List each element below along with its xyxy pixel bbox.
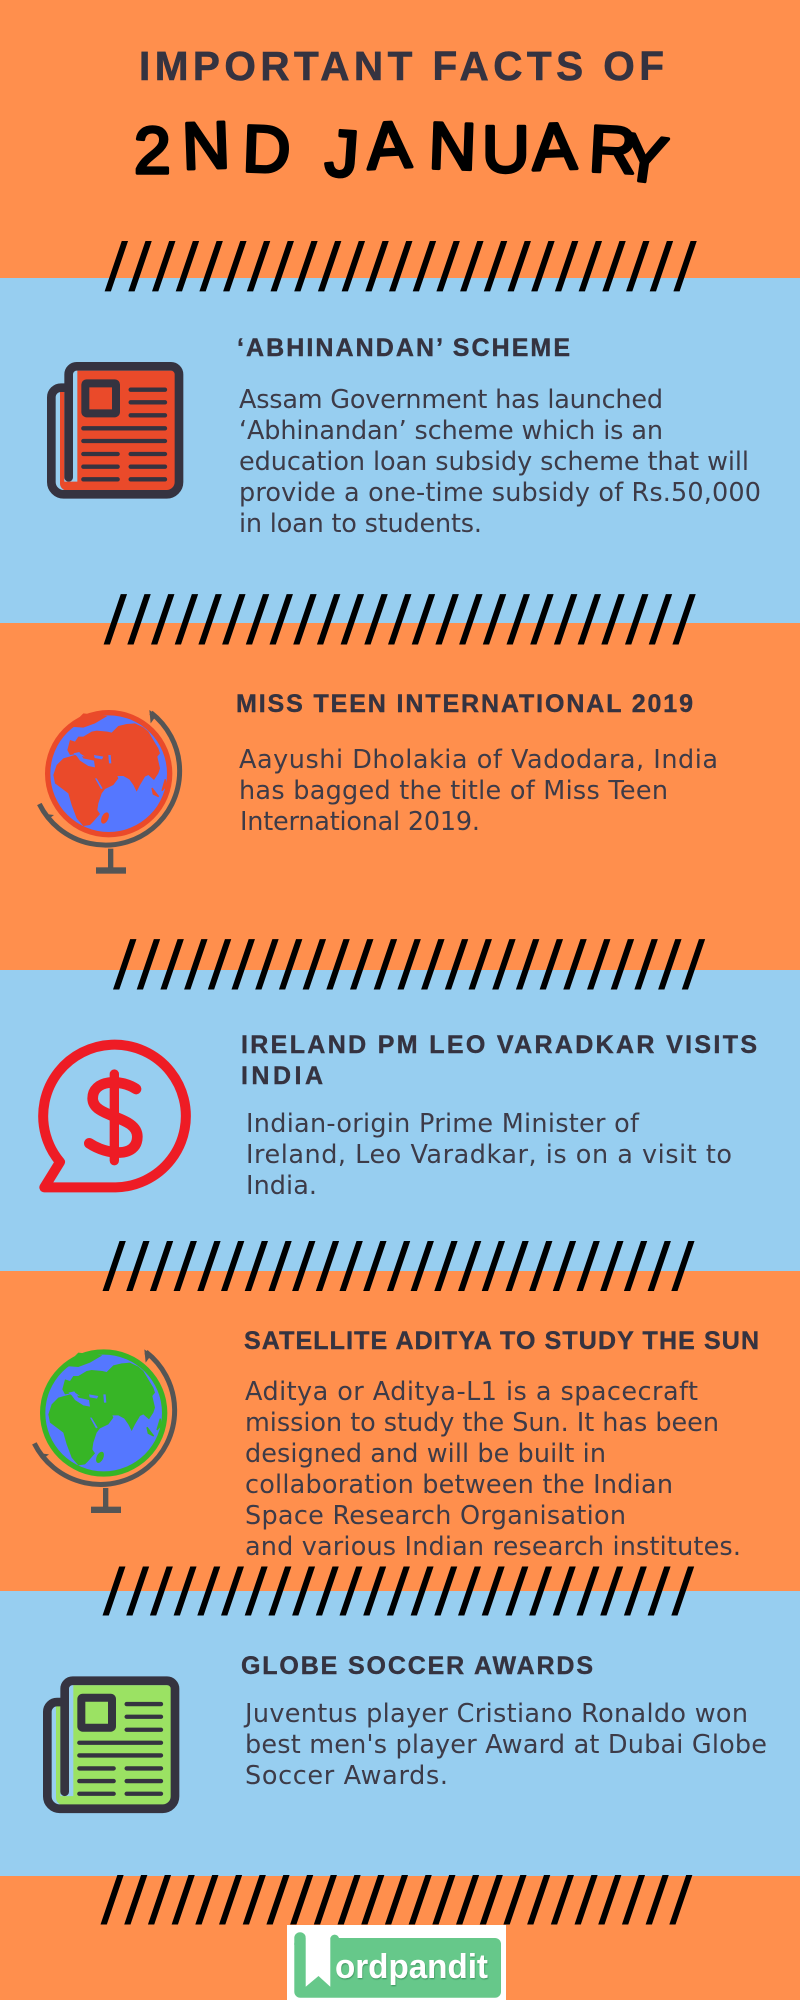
- body text: Indian-origin Prime Minister of: [246, 1109, 640, 1139]
- icon: dollar speech bubble: [43, 1045, 186, 1187]
- logo: Wordpandit: ordpandit: [335, 1948, 488, 1986]
- icon: red newspaper: [51, 366, 179, 494]
- body text: India.: [246, 1171, 317, 1201]
- body text: International 2019.: [240, 807, 480, 837]
- body text: [239, 745, 718, 837]
- body text: ‘Abhinandan’ scheme which is an: [239, 416, 663, 446]
- body text: [246, 1109, 732, 1201]
- body text: Soccer Awards.: [245, 1761, 448, 1791]
- body text: collaboration between the Indian: [245, 1470, 673, 1500]
- body text: Aditya or Aditya-L1 is a spacecraft: [245, 1377, 698, 1407]
- body text: Aayushi Dholakia of Vadodara, India: [239, 745, 718, 775]
- panel: footer: [0, 1876, 800, 2000]
- body text: provide a one-time subsidy of Rs.50,000: [239, 478, 761, 508]
- body text: and various Indian research institutes.: [245, 1532, 741, 1562]
- body text: [239, 385, 761, 539]
- body text: Space Research Organisation: [245, 1501, 626, 1531]
- heading: [241, 1031, 757, 1090]
- icon: green newspaper: [47, 1681, 175, 1809]
- heading: IRELAND PM LEO VARADKAR VISITS: [241, 1031, 757, 1059]
- body text: Ireland, Leo Varadkar, is on a visit to: [246, 1140, 732, 1170]
- body text: designed and will be built in: [245, 1439, 606, 1469]
- body text: has bagged the title of Miss Teen: [239, 776, 668, 806]
- heading: INDIA: [241, 1062, 323, 1090]
- panel: Globe Soccer Awards: [0, 1591, 800, 1876]
- icon: green globe: [34, 1349, 175, 1513]
- heading: SATELLITE ADITYA TO STUDY THE SUN: [244, 1327, 759, 1355]
- body text: mission to study the Sun. It has been: [245, 1408, 719, 1438]
- body text: education loan subsidy scheme that will: [239, 447, 749, 477]
- body text: Assam Government has launched: [239, 385, 663, 415]
- body text: [245, 1377, 741, 1562]
- title: important facts of: IMPORTANT FACTS OF: [139, 43, 664, 89]
- heading: MISS TEEN INTERNATIONAL 2019: [236, 690, 693, 718]
- heading: GLOBE SOCCER AWARDS: [241, 1652, 593, 1680]
- body text: in loan to students.: [239, 509, 482, 539]
- body text: best men's player Award at Dubai Globe: [245, 1730, 767, 1760]
- body text: [243, 1699, 767, 1791]
- panel: Miss Teen International: [0, 623, 800, 970]
- logo: Wordpandit: [287, 1925, 506, 2000]
- body text: Juventus player Cristiano Ronaldo won: [243, 1699, 748, 1729]
- title: 2nd January: 2ND JANUARY: [134, 107, 672, 198]
- panel: Satellite Aditya: [0, 1271, 800, 1591]
- icon: red globe: [39, 710, 180, 874]
- heading: ‘ABHINANDAN’ SCHEME: [237, 334, 570, 362]
- panel: header: [0, 0, 800, 278]
- panel: Abhinandan scheme: [0, 278, 800, 623]
- panel: Ireland PM visit: [0, 970, 800, 1271]
